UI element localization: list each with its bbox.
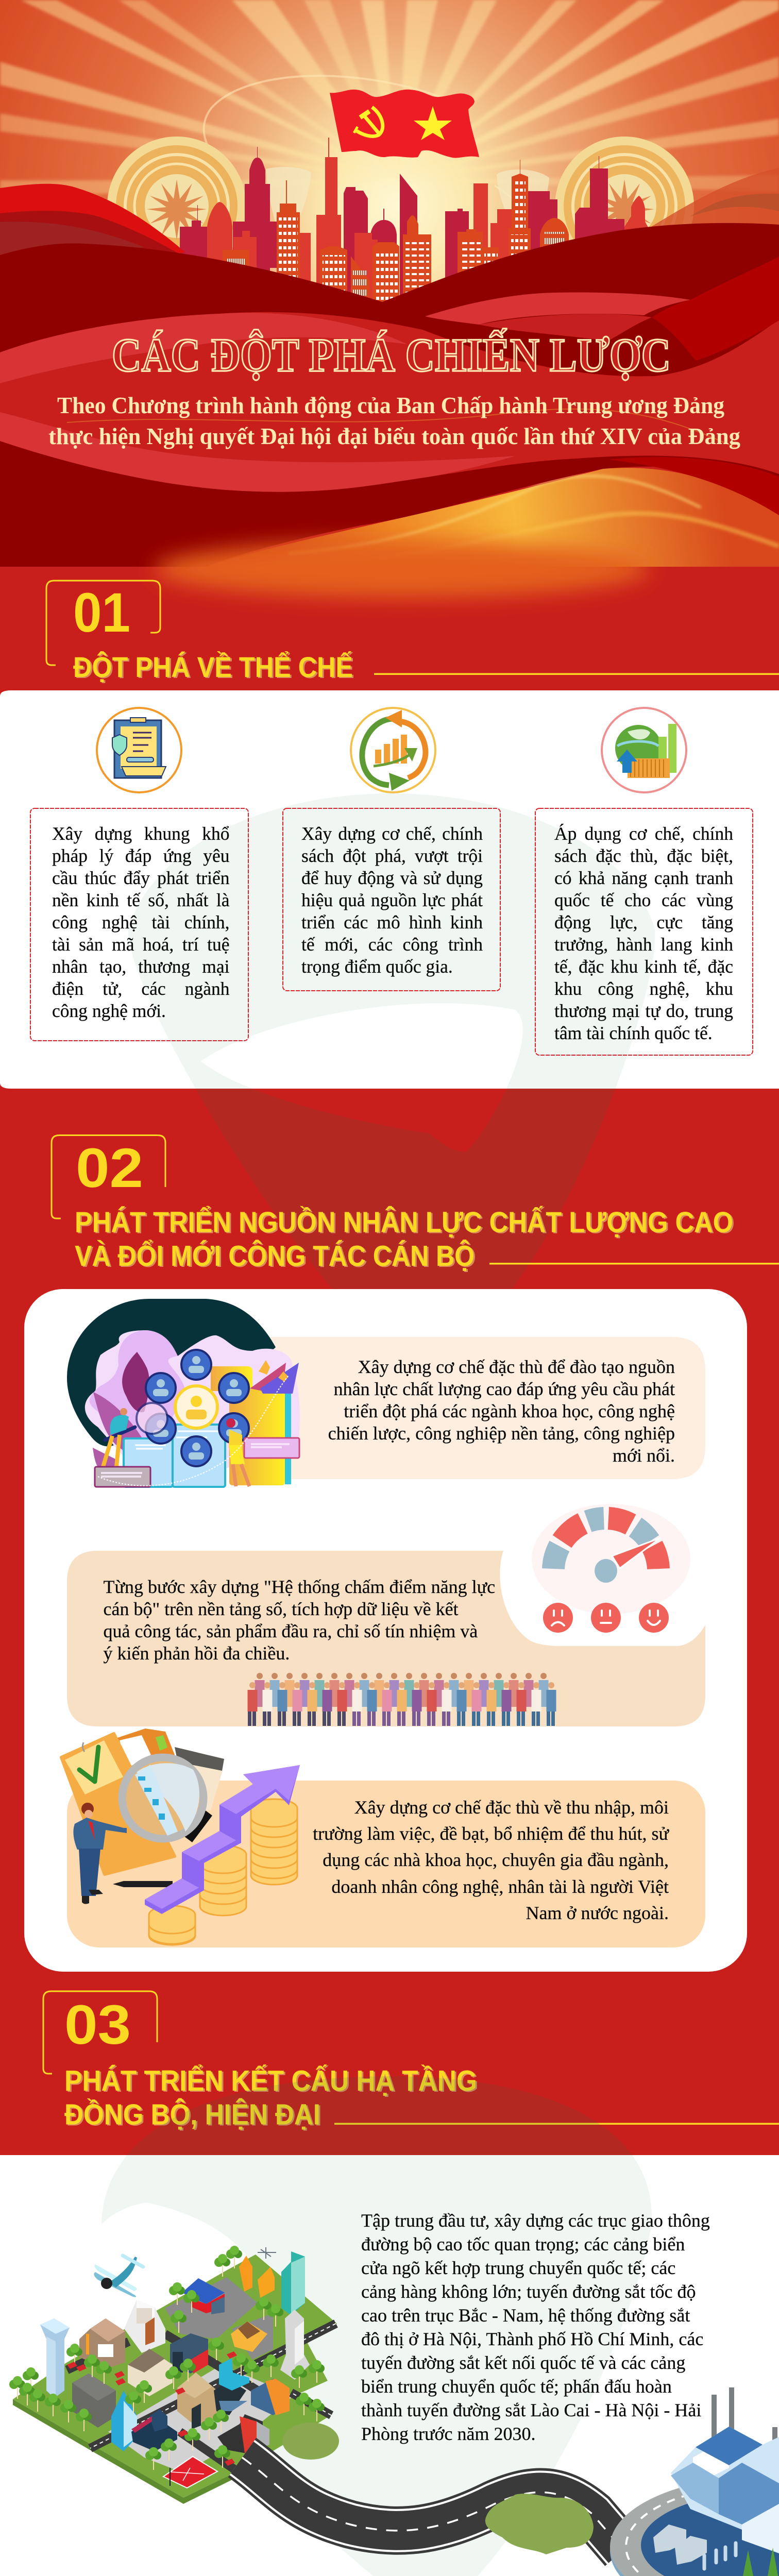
heading: section 3 [43,1991,779,2131]
panel: section 2 white [24,1289,747,1972]
pill: paragraph 1 background [247,1337,705,1479]
city buildings [40,2251,310,2488]
text: section 2 paragraph 1: triển đột phá các ngành khoa học, công nghệ [344,1401,675,1421]
text: section 2 paragraph 3 [313,1797,670,1923]
text: section 1 card 1: nhân tạo, thương mại [52,956,230,977]
road [242,2458,623,2550]
subtitle [48,392,740,449]
text: section 1 card 1 [52,823,230,1021]
heading: section 2: VÀ ĐỔI MỚI CÔNG TÁC CÁN BỘ [75,1239,475,1273]
text: section 3 transport: thành tuyến đường sắt Lào Cai - Hà Nội - Hải [361,2400,701,2420]
heading: section 2 [52,1136,779,1273]
illustration: talent profiles [67,1299,300,1487]
text: section 3 transport: cửa ngõ kết hợp trung chuyển quốc tế; các [361,2258,675,2278]
icon: drone [258,2247,276,2259]
hero red waves [0,223,779,567]
text: section 2 paragraph 1: nhân lực chất lượng cao đáp ứng yêu cầu phát [334,1379,675,1399]
text: section 1 card 3: khu công nghệ, khu [554,978,733,998]
illustration: performance gauge [532,1504,690,1633]
text: section 1 card 2: Xây dựng cơ chế, chính [301,823,483,844]
pill: paragraph 3 background [67,1781,705,1947]
right bronze drum [555,137,694,276]
hero background sunburst [0,0,779,567]
heading: section 3: PHÁT TRIỂN KẾT CẤU HẠ TẦNG [64,2064,477,2097]
text: section 3 transport: đô thị ở Hà Nội, Thành phố Hồ Chí Minh, các [361,2329,703,2349]
heading: section 2: 02 [76,1137,143,1199]
icon: trucks [653,2524,707,2565]
subtitle: thực hiện Nghị quyết Đại hội đại biểu toàn quốc lần thứ XIV của Đảng [48,423,740,449]
text: section 2 paragraph 1: chiến lược, công nghiệp nền tảng, công nghiệp [328,1423,675,1444]
text: section 2 paragraph 3: Xây dựng cơ chế đặc thù về thu nhập, môi [354,1797,669,1818]
icon: smiley faces [543,1603,669,1633]
city cars [67,2351,237,2466]
text: section 1 card 3: sách đặc thù, đặc biệt, [554,845,733,866]
heading: section 1 [46,581,779,683]
pill: paragraph 2 background [67,1551,705,1726]
icon: biplane [94,2256,143,2297]
title: CÁC ĐỘT PHÁ CHIẾN LƯỢC [112,329,671,381]
text: section 1 card 3: tế, đặc khu kinh tế, đặc [554,956,733,977]
icon: growth cycle [351,708,435,792]
text: section 2 paragraph 1: Xây dựng cơ chế đặc thù để đào tạo nguồn [358,1357,675,1377]
text: section 1 card 2: triển các mô hình kinh [301,912,483,933]
text: section 1 card 2 [301,823,483,977]
text: section 1 card 3 [554,823,733,1043]
icon: global trade [602,708,686,792]
text: section 1 card 3: trưởng, hành lang kinh [554,934,733,954]
text: section 1 card 3: thương mại tự do, trung [554,1001,733,1021]
text: section 2 paragraph 2: ý kiến phản hồi đa chiều. [103,1643,290,1664]
text: section 2 paragraph 1: mới nổi. [613,1445,675,1466]
text: section 1 card 1: công nghệ tài chính, [52,912,230,933]
text: section 1 card 2: tế mới, các công trình [301,934,483,954]
text: section 1 card 2: trọng điểm quốc gia. [301,956,453,977]
text: section 1 card 1: điện tử, các ngành [52,978,230,998]
text: section 2 paragraph 2: cán bộ" trên nền tảng số, tích hợp dữ liệu về kết [103,1599,459,1619]
heading: section 3: 03 [64,1993,131,2056]
text: section 1 card 2: sách đột phá, vượt trội [301,845,483,866]
icon: star on flag [414,106,452,140]
text: section 2 paragraph 3: trường làm việc, đề bạt, bổ nhiệm để thu hút, sử [313,1823,669,1844]
city skyline [180,138,665,309]
text: section 1 card 1: tài sản mã hoá, trí tuệ [52,934,230,954]
text: section 1 card 2: để huy động và sử dụng [301,868,483,888]
text: section 1 card 1: cầu thúc đẩy phát triển [52,868,230,888]
illustration: crowd of people [248,1676,556,1719]
text: section 1 card 1: nền kinh tế số, nhất là [52,889,230,910]
text: section 1 card 3: quốc tế cho các vùng [554,889,733,910]
text: section 1 card 3: tâm tài chính quốc tế. [554,1022,713,1043]
heading: section 1: ĐỘT PHÁ VỀ THỂ CHẾ [73,651,353,683]
text: section 2 paragraph 2: quả công tác, sản phẩm đầu ra, chỉ số tín nhiệm và [103,1621,478,1641]
text: section 1 card 3: Áp dụng cơ chế, chính [554,823,733,844]
left bronze drum [107,137,246,276]
text: section 2 paragraph 3: doanh nhân công nghệ, nhân tài là người Việt [331,1876,669,1897]
text: section 3 transport: Phòng trước năm 2030. [361,2424,536,2444]
text: section 3 transport: cao trên trục Bắc - Nam, hệ thống đường sắt [361,2305,690,2326]
text: section 2 paragraph 3: dụng các nhà khoa học, chuyên gia đầu ngành, [323,1850,669,1870]
section one to three red background [0,309,779,2155]
text: section 3 transport: biển trung chuyển quốc tế; phấn đấu hoàn [361,2376,672,2397]
text: section 2 paragraph 3: Nam ở nước ngoài. [526,1903,669,1923]
pale bowl shapes behind skyline [266,167,549,232]
illustration: folder, magnifier and growth arrow [61,1728,300,1945]
text: section 1 card 2: hiệu quả nguồn lực phát [301,889,483,910]
illustration: factory hub [610,2387,779,2576]
text: section 1 card 1: Xây dựng khung khổ [52,823,230,844]
text: section 3 transport [361,2210,710,2444]
boxes: section 1 dashed frames [30,808,753,1055]
text: section 2 paragraph 2 [103,1577,495,1664]
flag [330,90,479,158]
bush behind road [282,2422,339,2460]
back ribbons [0,168,779,273]
city trees [9,2246,325,2470]
text: section 2 paragraph 1 [328,1357,675,1466]
text: section 1 card 1: pháp lý đáp ứng yêu [52,845,230,866]
text: section 1 card 3: động lực, cực tăng [554,912,733,933]
watermark: section 1 logo [128,793,655,1289]
icon: workers and trees [704,2543,736,2569]
text: section 1 card 1: công nghệ mới. [52,1001,166,1021]
icon: legal clipboard [97,708,181,792]
text: section 1 card 3: có khả năng cạnh tranh [554,868,733,888]
watermark: section 3 logo [101,2076,652,2576]
text: section 2 paragraph 2: Từng bước xây dựng "Hệ thống chấm điểm năng lực [103,1577,495,1597]
text: section 3 transport: cảng hàng không lớn; tuyến đường sắt tốc độ [361,2281,696,2302]
heading: section 1: 01 [73,581,130,643]
text: section 3 transport: tuyến đường sắt kết nối quốc tế và các cảng [361,2352,685,2373]
icon: hammer and sickle [354,107,383,136]
panel: section 1 white [0,690,779,1089]
illustration: isometric city [9,2246,337,2504]
heading: section 3: ĐỒNG BỘ, HIỆN ĐẠI [64,2098,320,2131]
bush on road [485,2494,594,2554]
glow at top of section 1 [155,541,649,598]
text: section 3 transport: đường bộ cao tốc quan trọng; các cảng biển [361,2234,685,2255]
panel: section 3 white [0,2155,779,2576]
subtitle: Theo Chương trình hành động của Ban Chấp hành Trung ương Đảng [57,392,724,418]
text: section 3 transport: Tập trung đầu tư, xây dựng các trục giao thông [361,2210,710,2231]
